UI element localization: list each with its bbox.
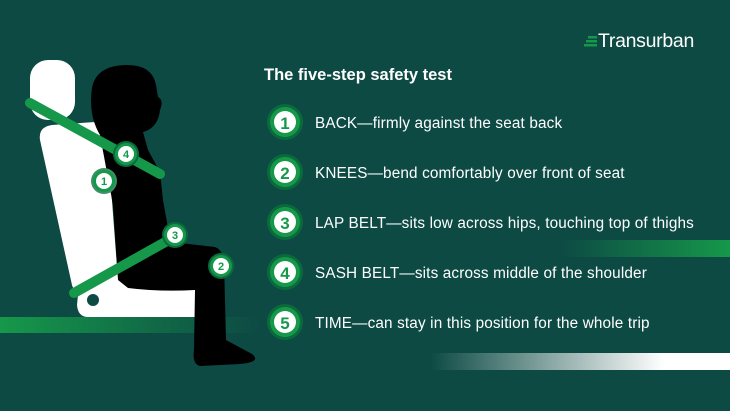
stripe: left green floor <box>0 317 260 333</box>
illustration: seated person with seatbelt <box>30 60 255 366</box>
seat cushion <box>77 272 196 317</box>
logo: Transurban: Transurban <box>598 30 694 52</box>
step 3: 3 <box>280 214 290 233</box>
marker 1: 1 <box>101 176 107 188</box>
step 3: LAP BELT—sits low across hips, touching top of thighs <box>315 215 694 232</box>
marker 4: 4 <box>123 149 130 161</box>
marker 3: 3 <box>172 230 178 242</box>
marker 2: 2 <box>218 261 224 273</box>
title: The five-step safety test <box>264 66 452 84</box>
step 2: KNEES—bend comfortably over front of seat <box>315 165 625 182</box>
step 4: SASH BELT—sits across middle of the shoulder <box>315 265 647 282</box>
step 4: 4 <box>280 264 290 283</box>
step 2 <box>267 154 625 190</box>
marker 3 <box>162 222 188 248</box>
stripe: right white <box>430 353 730 370</box>
belt: lap <box>74 236 176 293</box>
step 1: BACK—firmly against the seat back <box>315 115 562 132</box>
seat headrest <box>30 60 75 120</box>
seat back <box>40 122 118 292</box>
step 1: 1 <box>280 114 290 133</box>
marker 1 <box>91 168 117 194</box>
step 4 <box>267 254 647 290</box>
step 5: 5 <box>280 314 290 333</box>
marker 4 <box>113 141 139 167</box>
step 3 <box>267 204 694 240</box>
step list <box>267 104 694 340</box>
step 5: TIME—can stay in this position for the whole trip <box>315 315 650 332</box>
step 2: 2 <box>280 164 290 183</box>
step 5 <box>267 304 650 340</box>
marker 2 <box>208 253 234 279</box>
person silhouette <box>91 65 255 366</box>
step 1 <box>267 104 562 140</box>
stripe: right green <box>560 240 730 257</box>
belt: sash <box>30 103 160 174</box>
